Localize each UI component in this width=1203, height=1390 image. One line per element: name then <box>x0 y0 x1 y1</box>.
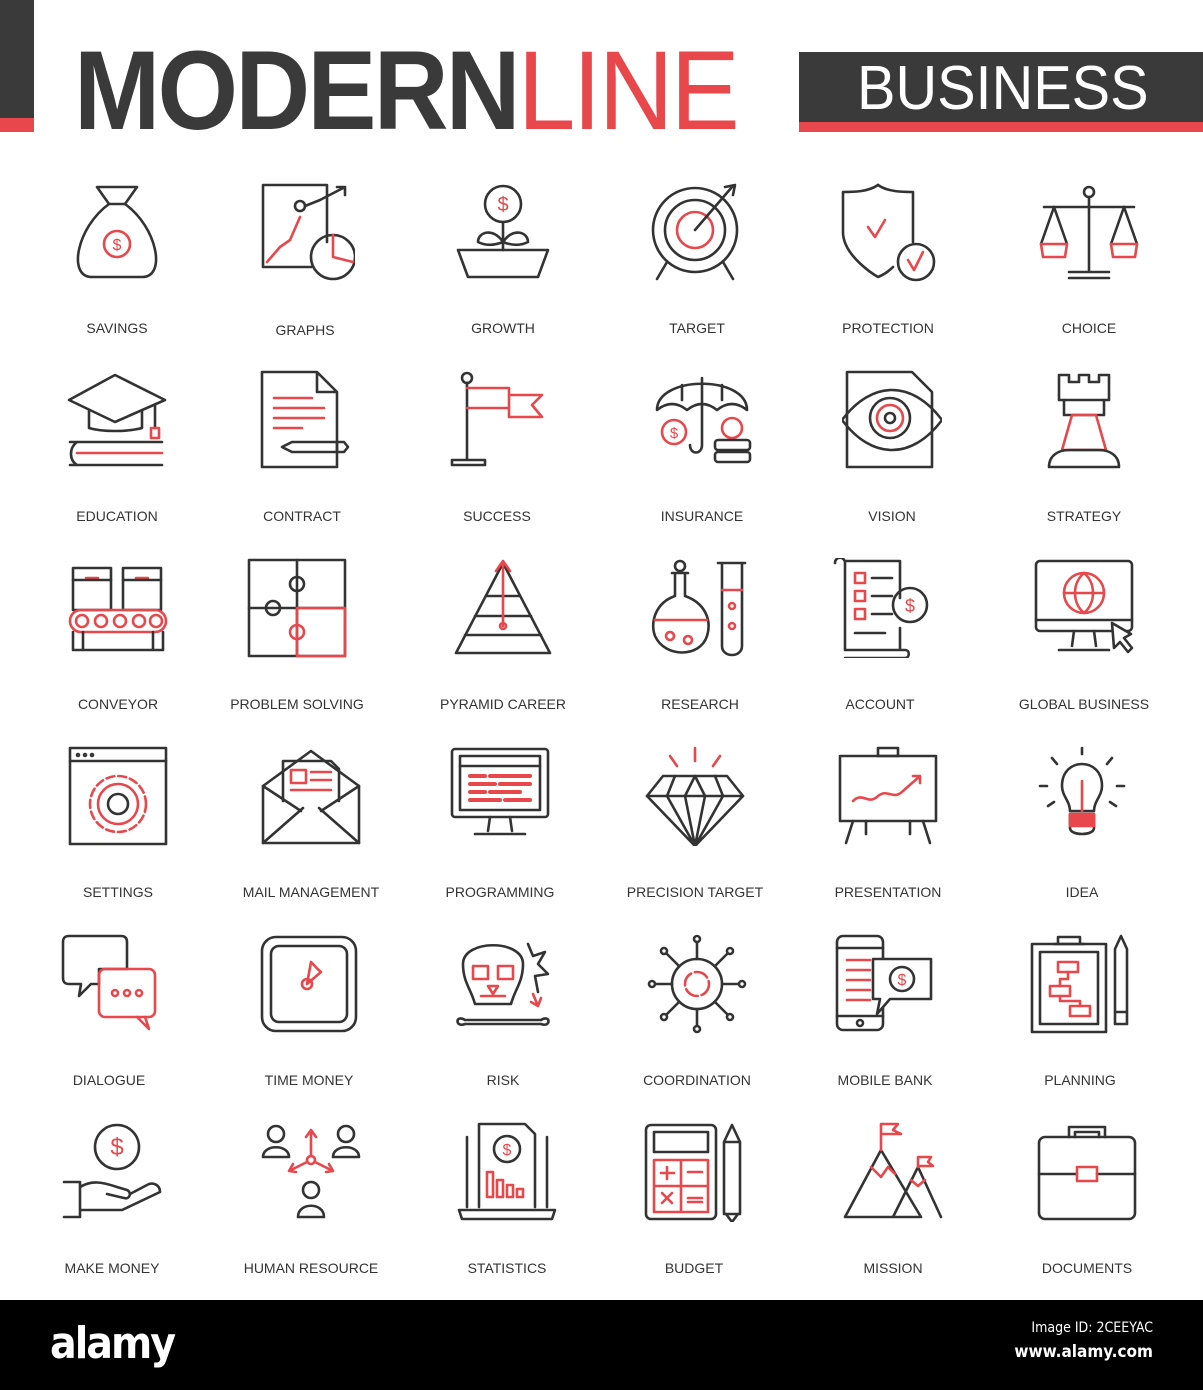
icon: strategy <box>1047 374 1121 524</box>
icon: growth: GROWTH <box>471 320 535 336</box>
icon: research: RESEARCH <box>661 696 739 712</box>
icon: education: EDUCATION <box>76 508 158 524</box>
icon: settings: SETTINGS <box>83 884 153 900</box>
icon: success: SUCCESS <box>463 508 531 524</box>
icon: human resource <box>244 1124 378 1276</box>
icon: growth: $ <box>497 194 509 216</box>
icon: mission: MISSION <box>863 1260 923 1276</box>
icon: mail management <box>243 750 379 900</box>
icon: budget: BUDGET <box>665 1260 723 1276</box>
icon: idea <box>1038 746 1126 900</box>
icon: pyramid career <box>440 560 566 712</box>
icon: conveyor <box>68 566 168 712</box>
icon: statistics: STATISTICS <box>468 1260 546 1276</box>
icon: precision target <box>627 746 763 900</box>
icon: settings <box>68 746 168 900</box>
icon: global business: GLOBAL BUSINESS <box>1019 696 1149 712</box>
icon: mission <box>844 1122 942 1276</box>
icon: protection: PROTECTION <box>842 320 934 336</box>
icon: risk <box>456 942 550 1088</box>
icon: mobile bank: $ <box>898 972 907 989</box>
icon: problem solving <box>230 558 364 712</box>
icon: insurance <box>656 376 752 524</box>
icon: graphs <box>262 184 355 338</box>
icon: presentation: PRESENTATION <box>835 884 941 900</box>
business banner <box>799 52 1203 132</box>
icon: documents <box>1038 1126 1136 1276</box>
icon: statistics <box>458 1122 556 1276</box>
icon: account: ACCOUNT <box>845 696 915 712</box>
icon: protection <box>842 184 936 336</box>
icon: idea: IDEA <box>1066 884 1098 900</box>
icon: target <box>652 184 738 336</box>
icon: education <box>68 374 166 524</box>
icon: savings: SAVINGS <box>86 320 148 336</box>
icon: planning: PLANNING <box>1044 1072 1116 1088</box>
footer text: www.alamy.com <box>1014 1342 1153 1362</box>
icon: contract: CONTRACT <box>263 508 341 524</box>
icon: conveyor: CONVEYOR <box>78 696 158 712</box>
icon: mobile bank <box>836 934 932 1088</box>
icon: contract <box>260 370 350 524</box>
footer logo: alamy <box>50 1318 174 1369</box>
icon: account: $ <box>905 596 915 616</box>
icon: time money <box>260 936 358 1088</box>
icon: make money: MAKE MONEY <box>65 1260 159 1276</box>
icon: make money <box>62 1124 162 1276</box>
icon: budget <box>644 1124 742 1276</box>
footer text <box>1014 1320 1153 1362</box>
icon: programming <box>446 748 554 900</box>
icon: research <box>652 560 746 712</box>
icon: mobile bank: MOBILE BANK <box>838 1072 932 1088</box>
icon: insurance: INSURANCE <box>661 508 743 524</box>
icon: statistics: $ <box>503 1142 512 1159</box>
icon: presentation <box>835 746 941 900</box>
icon: growth <box>456 184 550 336</box>
icon: global business <box>1019 560 1149 712</box>
icon: dialogue <box>62 934 156 1088</box>
icon: target: TARGET <box>669 320 725 336</box>
icon: planning <box>1030 934 1128 1088</box>
footer text: Image ID: 2CEEYAC <box>1031 1320 1153 1336</box>
icon: human resource: HUMAN RESOURCE <box>244 1260 378 1276</box>
icon: coordination <box>643 934 751 1088</box>
icon: pyramid career: PYRAMID CAREER <box>440 696 566 712</box>
icon: programming: PROGRAMMING <box>446 884 554 900</box>
icon: vision: VISION <box>868 508 916 524</box>
icon: problem solving: PROBLEM SOLVING <box>230 696 364 712</box>
icon: account <box>834 558 928 712</box>
business banner: BUSINESS <box>857 54 1149 123</box>
icon: coordination: COORDINATION <box>643 1072 751 1088</box>
icon: savings: $ <box>113 237 122 254</box>
icon: savings <box>76 186 158 336</box>
icon: insurance: $ <box>670 425 679 442</box>
icon: strategy: STRATEGY <box>1047 508 1121 524</box>
icon: graphs: GRAPHS <box>275 322 335 338</box>
icon: precision target: PRECISION TARGET <box>627 884 763 900</box>
icon: mail management: MAIL MANAGEMENT <box>243 884 379 900</box>
icon: choice: CHOICE <box>1062 320 1116 336</box>
icon: success <box>450 372 544 524</box>
icon: choice <box>1040 186 1138 336</box>
icon: make money: $ <box>110 1134 124 1161</box>
icon: documents: DOCUMENTS <box>1042 1260 1132 1276</box>
icon: time money: TIME MONEY <box>265 1072 353 1088</box>
footer bar <box>0 1300 1203 1390</box>
icon: dialogue: DIALOGUE <box>73 1072 145 1088</box>
icon: vision <box>842 370 942 524</box>
icon: risk: RISK <box>487 1072 519 1088</box>
title: MODERNLINE <box>74 28 737 153</box>
header left bar <box>0 0 34 132</box>
